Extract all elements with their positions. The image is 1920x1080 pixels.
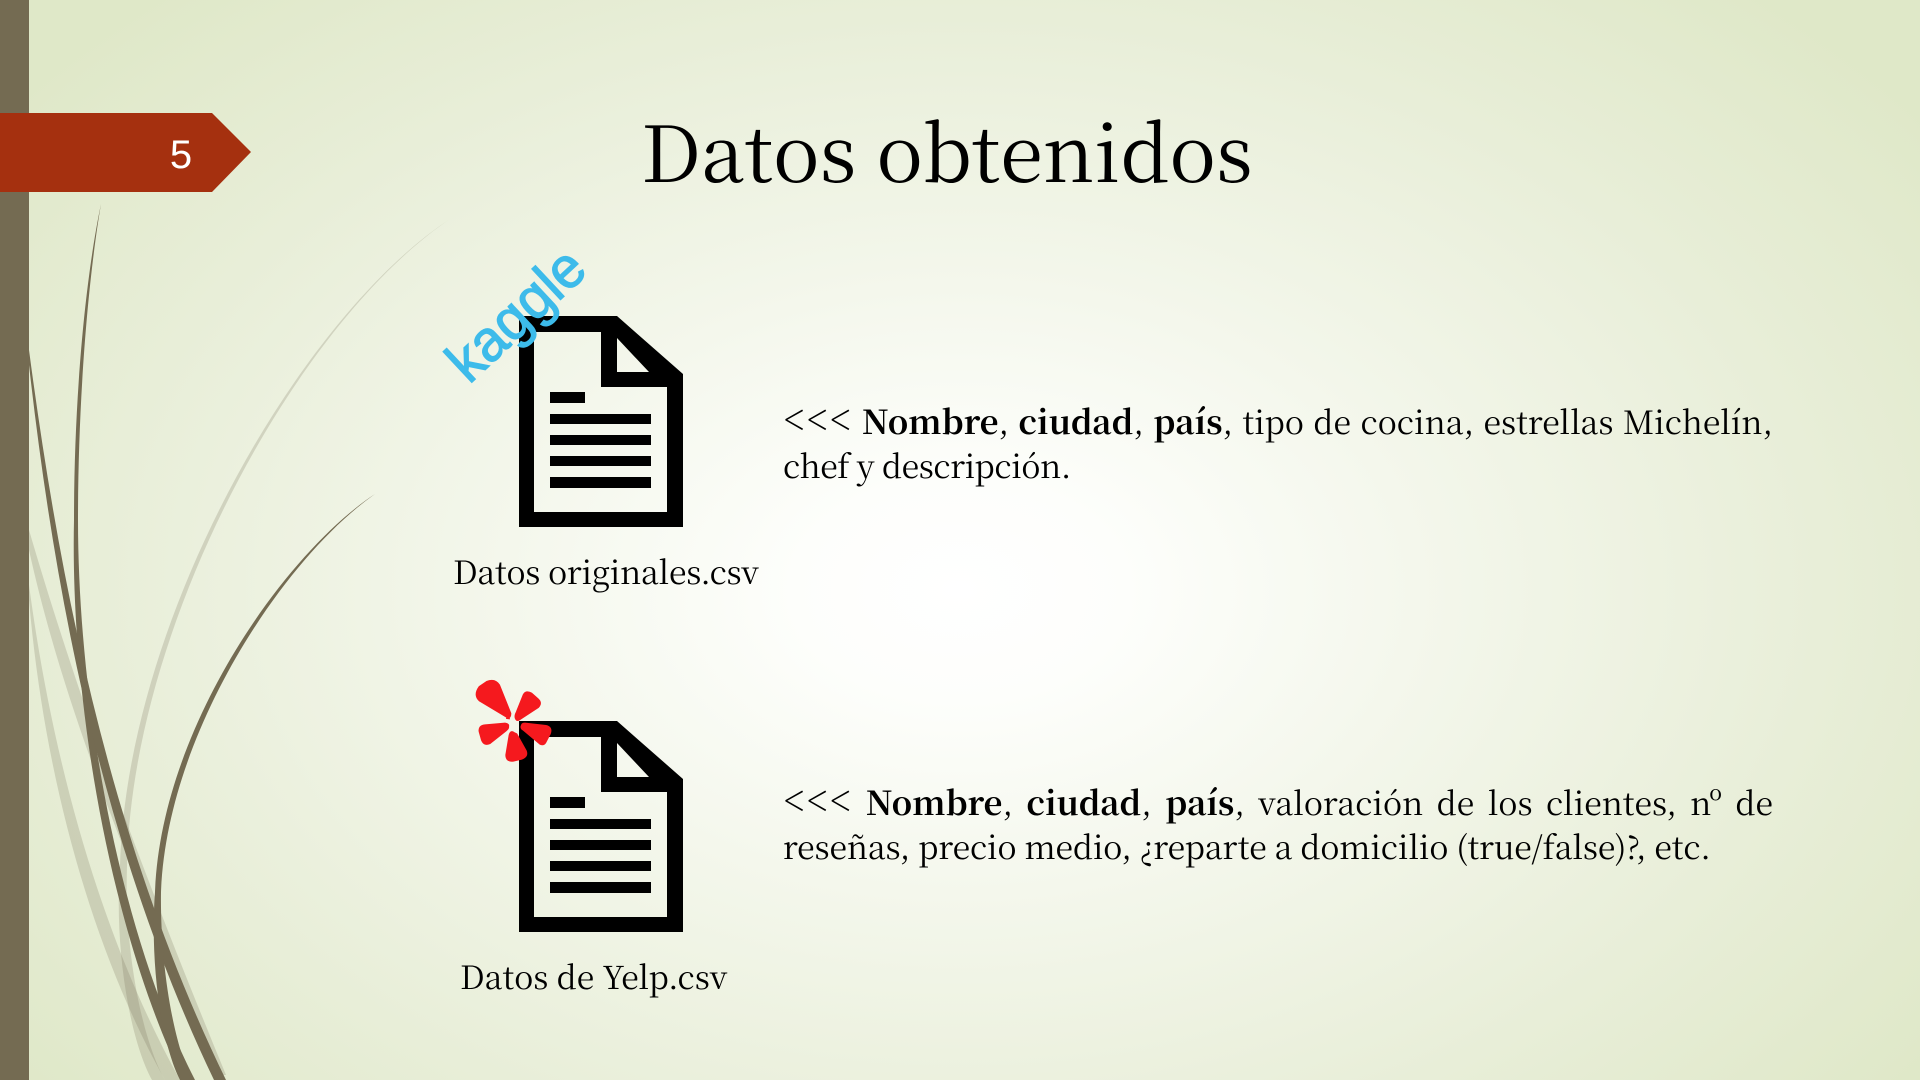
title: Datos obtenidos bbox=[641, 93, 1253, 205]
description: second dataset: <<< Nombre, ciudad, país, valoración de los clientes, nº de bbox=[783, 771, 1773, 827]
label: Datos originales.csv: Datos originales.csv bbox=[453, 548, 759, 594]
description: second dataset: reseñas, precio medio, ¿reparte a domicilio (true/false)?, etc. bbox=[783, 822, 1711, 868]
page number tag bbox=[0, 113, 251, 192]
icon: document with kaggle logo bbox=[434, 240, 683, 527]
icon: document with yelp logo bbox=[476, 680, 683, 932]
grass curves bbox=[29, 204, 450, 1080]
description: first dataset: chef y descripción. bbox=[783, 442, 1071, 488]
sidebar bbox=[0, 0, 29, 1080]
description: first dataset: <<< Nombre, ciudad, país, tipo de cocina, estrellas Michelín, bbox=[783, 390, 1773, 446]
description: second dataset bbox=[783, 771, 1773, 868]
page number tag: 5 bbox=[170, 133, 192, 177]
label: Datos de Yelp.csv: Datos de Yelp.csv bbox=[460, 953, 727, 999]
description: first dataset bbox=[783, 390, 1773, 488]
